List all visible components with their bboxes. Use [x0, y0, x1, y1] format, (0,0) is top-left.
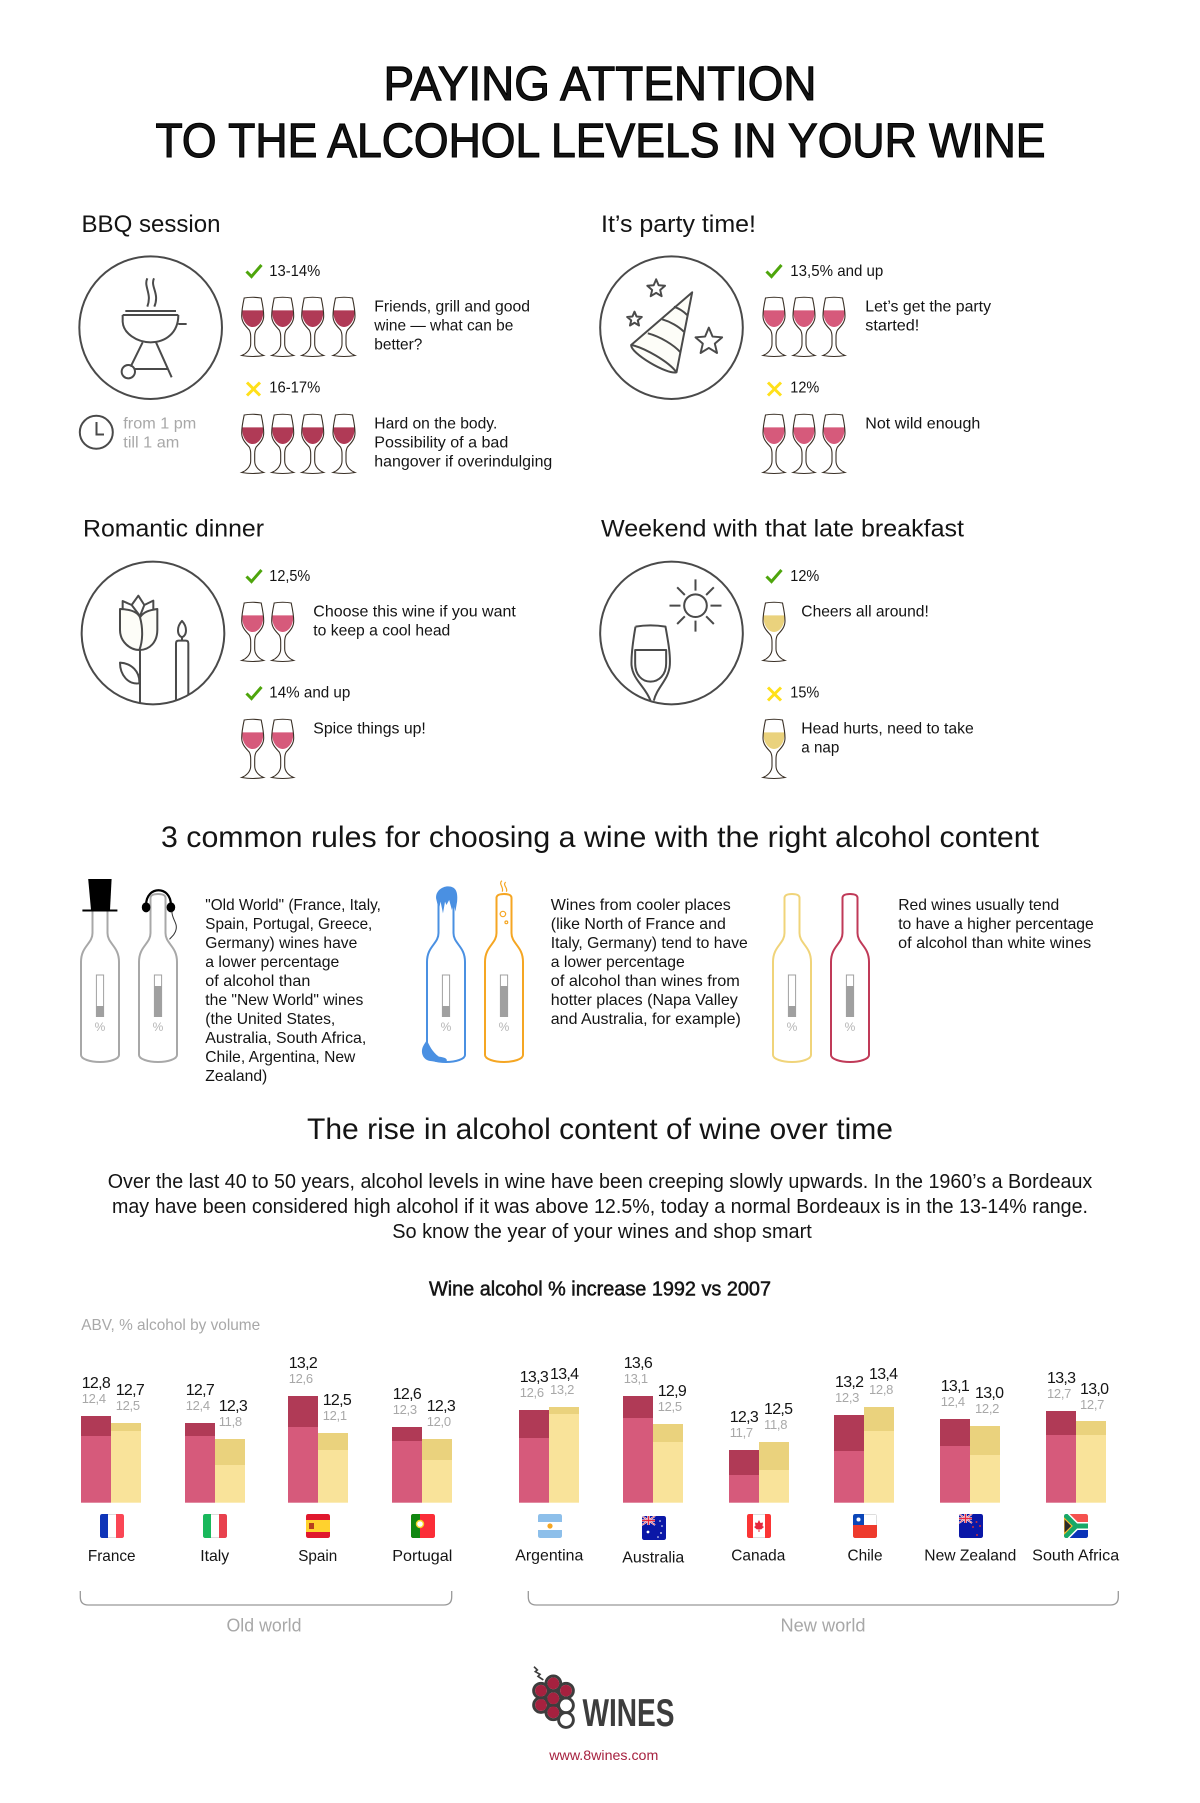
- text: old world rule: (the United States,: [205, 1011, 335, 1028]
- text block: intro paragraph: So know the year of your wines and shop smart: [392, 1221, 812, 1243]
- chart: Australia: 13,6: [624, 1355, 653, 1372]
- text: climate rule: Wines from cooler places: [551, 897, 731, 914]
- text: climate rule: hotter places (Napa Valley: [551, 992, 738, 1009]
- axis label: ABV, % alcohol by volume: [81, 1317, 260, 1334]
- icon: rose and candle in circle: [82, 562, 224, 704]
- icon: grey bottle with headphones: [139, 890, 177, 1062]
- bad choice: 16-17%: [242, 380, 552, 474]
- good choice: 13-14%: Friends, grill and good: [374, 299, 530, 316]
- chart: Canada: 11,7: [730, 1425, 753, 1440]
- text: old world rule: Germany) wines have: [205, 935, 357, 952]
- chart: Italy: 11,8: [219, 1414, 242, 1429]
- logo: 8 Wines: WINES: [582, 1692, 674, 1735]
- text: climate rule: and Australia, for example): [551, 1011, 741, 1028]
- icon: orange hot bottle: [485, 881, 523, 1062]
- text: climate rule: a lower percentage: [551, 954, 685, 971]
- chart: Canada: Canada: [731, 1548, 785, 1565]
- chart: Spain: 13,2: [289, 1355, 318, 1372]
- bracket: old world group: Old world: [226, 1616, 302, 1636]
- chart: Chile: 12,3: [835, 1390, 859, 1405]
- good choice: 14% and up: 14% and up: [269, 685, 350, 702]
- good choice: 13-14%: [242, 263, 530, 356]
- icon: grey bottle with headphones: %: [153, 1020, 164, 1034]
- chart: Spain: [288, 1355, 352, 1565]
- chart: South Africa: 13,0: [1080, 1381, 1109, 1398]
- bracket: old world group: [80, 1591, 452, 1636]
- icon: yellow white-wine bottle: %: [787, 1020, 798, 1034]
- good choice: 12%: Cheers all around!: [801, 604, 929, 621]
- text: colour rule: to have a higher percentage: [898, 916, 1094, 933]
- panel: BBQ session: [79, 211, 552, 474]
- icon: sun and wine glass in circle: [600, 562, 743, 704]
- chart: Italy: Italy: [200, 1548, 229, 1565]
- chart: Italy: 12,4: [186, 1398, 210, 1413]
- bad choice: 16-17%: Hard on the body.: [374, 416, 497, 433]
- chart: South Africa: [1032, 1370, 1119, 1565]
- chart: France: [81, 1375, 145, 1565]
- icon: grey bottle with top hat: [81, 879, 119, 1062]
- chart: Argentina: 13,2: [550, 1382, 574, 1397]
- chart: Canada: [729, 1401, 793, 1565]
- time range: from 1 pm: [123, 416, 196, 433]
- chart title: Wine alcohol % increase 1992 vs 2007: [429, 1278, 771, 1300]
- time range: [123, 416, 196, 452]
- chart: Argentina: 12,6: [520, 1385, 544, 1400]
- text: climate rule: (like North of France and: [551, 916, 726, 933]
- chart: Italy: 12,3: [219, 1398, 248, 1415]
- chart: New Zealand: 13,1: [941, 1378, 970, 1395]
- icon: orange hot bottle: %: [499, 1020, 510, 1034]
- bad choice: 12%: Not wild enough: [865, 416, 980, 433]
- good choice: 13,5% and up: 13,5% and up: [790, 263, 883, 280]
- bad choice: 15%: 15%: [790, 685, 819, 702]
- text: old world rule: of alcohol than: [205, 973, 310, 990]
- chart: Chile: 12,8: [869, 1382, 893, 1397]
- chart: Australia: 12,5: [658, 1399, 682, 1414]
- chart: Canada: 12,3: [730, 1409, 759, 1426]
- title: [156, 58, 1046, 168]
- chart: Chile: Chile: [848, 1548, 883, 1565]
- logo: 8 Wines: www.8wines.com: [548, 1747, 658, 1763]
- bad choice: 15%: [763, 685, 974, 778]
- chart: South Africa: South Africa: [1032, 1548, 1119, 1565]
- text block: intro paragraph: may have been considered high alcohol if it was above 12.5%, today a normal Bordeaux is in the 13-14% range.: [112, 1196, 1088, 1218]
- icon: blue frozen bottle: [422, 886, 465, 1062]
- chart: France: 12,7: [116, 1382, 145, 1399]
- chart: New Zealand: [924, 1378, 1016, 1565]
- icon: blue frozen bottle: %: [441, 1020, 452, 1034]
- bad choice: 16-17%: Possibility of a bad: [374, 435, 508, 452]
- good choice: 12,5%: 12,5%: [269, 568, 310, 585]
- bracket: new world group: [528, 1591, 1118, 1636]
- icon: clock: [80, 416, 113, 449]
- panel: rule 3 red vs white: [773, 894, 1094, 1062]
- heading: 3 common rules: 3 common rules for choosing a wine with the right alcohol content: [161, 821, 1040, 854]
- text: colour rule: Red wines usually tend: [898, 897, 1059, 914]
- good choice: 13,5% and up: Let’s get the party: [865, 299, 991, 316]
- good choice: 12,5%: Choose this wine if you want: [313, 604, 516, 621]
- panel: romantic dinner: [82, 516, 516, 778]
- icon: yellow white-wine bottle: [773, 894, 811, 1062]
- good choice: 13-14%: wine — what can be: [373, 318, 513, 335]
- text: old world rule: "Old World" (France, Italy,: [205, 897, 381, 914]
- chart: Canada: 12,5: [764, 1401, 793, 1418]
- text: old world rule: the "New World" wines: [205, 992, 363, 1009]
- chart: Portugal: [392, 1386, 456, 1565]
- good choice: 12,5%: to keep a cool head: [313, 623, 450, 640]
- chart: Argentina: [515, 1366, 583, 1565]
- title: PAYING ATTENTION: [384, 58, 816, 111]
- chart: South Africa: 12,7: [1047, 1386, 1071, 1401]
- text block: intro paragraph: [108, 1171, 1092, 1243]
- heading: BBQ session: BBQ session: [82, 211, 220, 238]
- text: colour rule: of alcohol than white wines: [898, 935, 1091, 952]
- panel: weekend late breakfast: [600, 516, 974, 778]
- chart: Australia: [622, 1355, 687, 1567]
- panel: party time: [600, 211, 991, 474]
- text: climate rule: [551, 897, 748, 1028]
- chart: New Zealand: 12,2: [975, 1401, 999, 1416]
- good choice: 13,5% and up: [763, 263, 991, 356]
- heading: Weekend with that late breakfast: Weekend with that late breakfast: [601, 516, 964, 543]
- icon: red wine bottle: [831, 894, 869, 1062]
- text: old world rule: Chile, Argentina, New: [205, 1049, 356, 1066]
- bad choice: 12%: 12%: [790, 380, 819, 397]
- chart: France: France: [88, 1548, 136, 1565]
- chart: Portugal: 12,3: [427, 1398, 456, 1415]
- chart: Portugal: Portugal: [392, 1548, 452, 1565]
- chart: New Zealand: 13,0: [975, 1385, 1004, 1402]
- chart: France: 12,5: [116, 1398, 140, 1413]
- chart: Portugal: 12,0: [427, 1414, 451, 1429]
- text: climate rule: of alcohol than wines from: [551, 973, 740, 990]
- text block: intro paragraph: Over the last 40 to 50 years, alcohol levels in wine have been creeping slowly upwards. In the 1960’s a Bordeaux: [108, 1171, 1092, 1193]
- heading: It's party time: It’s party time!: [601, 211, 756, 238]
- icon: red wine bottle: %: [845, 1020, 856, 1034]
- icon: barbecue grill in circle: [79, 256, 222, 399]
- bad choice: 15%: a nap: [801, 740, 839, 757]
- chart: Canada: 11,8: [764, 1417, 787, 1432]
- chart: Portugal: 12,3: [393, 1402, 417, 1417]
- bad choice: 15%: Head hurts, need to take: [801, 721, 974, 738]
- good choice: 13-14%: better?: [374, 337, 422, 354]
- text: old world rule: Spain, Portugal, Greece,: [205, 916, 372, 933]
- bad choice: 16-17%: 16-17%: [269, 380, 320, 397]
- text: old world rule: a lower percentage: [205, 954, 339, 971]
- chart: New Zealand: 12,4: [941, 1394, 965, 1409]
- chart: Chile: 13,2: [835, 1374, 864, 1391]
- chart: Australia: Australia: [622, 1550, 684, 1567]
- text: old world rule: Zealand): [205, 1068, 267, 1085]
- chart: Portugal: 12,6: [393, 1386, 422, 1403]
- panel: rule 1 old world vs new world: [81, 879, 381, 1085]
- chart: Argentina: 13,4: [550, 1366, 579, 1383]
- icon: grey bottle with top hat: %: [95, 1020, 106, 1034]
- heading: rise in alcohol content: The rise in alcohol content of wine over time: [307, 1113, 893, 1146]
- chart: Argentina: Argentina: [515, 1548, 583, 1565]
- time range: till 1 am: [123, 435, 179, 452]
- chart: Spain: Spain: [298, 1548, 337, 1565]
- chart: France: 12,8: [82, 1375, 111, 1392]
- bad choice: 16-17%: hangover if overindulging: [374, 454, 552, 471]
- chart: Spain: 12,5: [323, 1392, 352, 1409]
- chart: Australia: 13,1: [624, 1371, 648, 1386]
- chart: Chile: [834, 1366, 898, 1565]
- text: climate rule: Italy, Germany) tend to have: [551, 935, 748, 952]
- text: old world rule: Australia, South Africa,: [205, 1030, 366, 1047]
- good choice: 13-14%: 13-14%: [269, 263, 320, 280]
- bad choice: 12%: [763, 380, 980, 474]
- logo: 8 Wines: [534, 1667, 674, 1763]
- panel: rule 2 cool vs hot climate: [422, 881, 748, 1062]
- chart: Spain: 12,1: [323, 1408, 347, 1423]
- good choice: 12,5%: [242, 568, 516, 662]
- chart: Spain: 12,6: [289, 1371, 313, 1386]
- chart: Italy: [185, 1382, 248, 1565]
- chart: Chile: 13,4: [869, 1366, 898, 1383]
- chart: Argentina: 13,3: [520, 1369, 549, 1386]
- chart: South Africa: 12,7: [1080, 1397, 1104, 1412]
- title: TO THE ALCOHOL LEVELS IN YOUR WINE: [156, 115, 1046, 168]
- chart: Italy: 12,7: [186, 1382, 215, 1399]
- chart: France: 12,4: [82, 1391, 106, 1406]
- heading: Romantic dinner: Romantic dinner: [83, 516, 264, 543]
- chart: Australia: 12,9: [658, 1383, 687, 1400]
- text: colour rule: [898, 897, 1094, 952]
- icon: party hat and stars in circle: [600, 256, 743, 399]
- bracket: new world group: New world: [780, 1616, 866, 1636]
- good choice: 12%: [763, 568, 929, 662]
- chart: South Africa: 13,3: [1047, 1370, 1076, 1387]
- good choice: 14% and up: Spice things up!: [313, 721, 426, 738]
- good choice: 14% and up: [242, 685, 426, 778]
- good choice: 12%: 12%: [790, 568, 819, 585]
- chart: New Zealand: New Zealand: [924, 1548, 1016, 1565]
- text: old world rule: [205, 897, 381, 1085]
- good choice: 13,5% and up: started!: [865, 318, 919, 335]
